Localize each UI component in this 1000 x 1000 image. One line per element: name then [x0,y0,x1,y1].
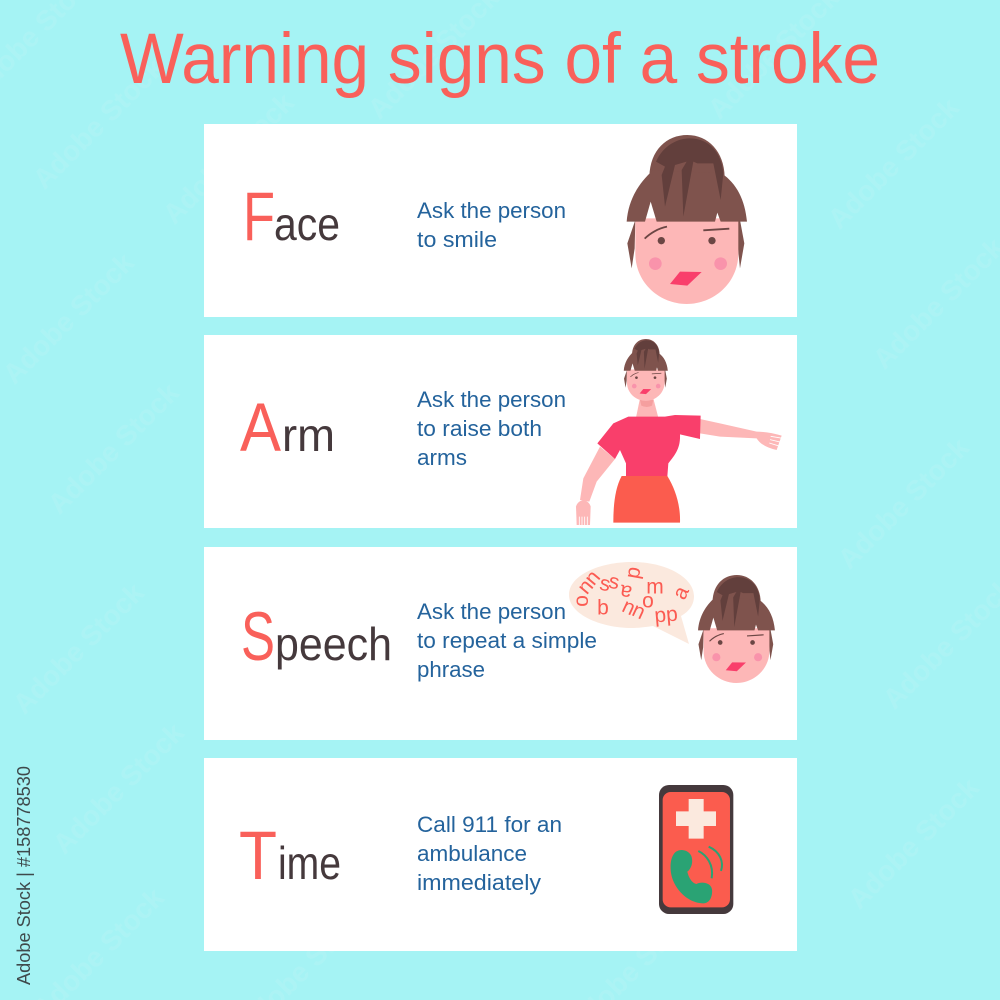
stock credit: Adobe Stock | #158778530 [13,766,34,985]
watermark pattern: Adobe Stock [27,52,170,195]
speech bubble with scrambled letters: s [607,570,621,594]
icon: small head [624,339,668,401]
heading: Speech [241,598,392,675]
text: ask the person to repeat a simple phrase [417,599,597,682]
text: ask the person to raise both arms: Ask the person [417,387,566,412]
text: ask the person to raise both arms: to raise both [417,416,542,441]
text: ask the person to repeat a simple phrase: phrase [417,657,485,682]
heading: Time: T [239,817,277,894]
speech bubble with scrambled letters: a [668,583,694,603]
speech bubble with scrambled letters: o [572,595,594,607]
heading: Arm: A [240,389,281,466]
speech bubble with scrambled letters: d [623,565,647,581]
heading: Face [243,178,340,255]
heading: Arm [240,389,335,466]
speech bubble with scrambled letters: pp [653,603,679,627]
text: ask the person to smile: Ask the person [417,198,566,223]
heading: Time [239,817,341,894]
heading: Face: ace [274,198,340,250]
speech bubble with scrambled letters: u [628,600,648,626]
panel: time [204,758,797,951]
title: Warning signs of a stroke [120,20,880,99]
icon: phone with medical cross [659,785,733,914]
watermark pattern: Adobe Stock [842,772,985,915]
text: ask the person to repeat a simple phrase: to repeat a simple [417,628,597,653]
panel: arm [204,335,797,528]
speech bubble with scrambled letters [569,562,694,644]
panel: speech [204,547,797,740]
watermark pattern: Adobe Stock [7,577,150,720]
text: ask the person to smile: to smile [417,227,497,252]
icon: head speaking [698,575,775,683]
text: call 911 for an ambulance immediately [417,812,562,895]
text: ask the person to smile [417,198,566,252]
watermark pattern: Adobe Stock [832,432,975,575]
text: call 911 for an ambulance immediately: Call 911 for an [417,812,562,837]
watermark pattern: Adobe Stock [822,92,965,235]
heading: Arm: rm [282,409,335,461]
watermark pattern: Adobe Stock [157,87,300,230]
text: call 911 for an ambulance immediately: ambulance [417,841,527,866]
watermark pattern: Adobe Stock [47,717,190,860]
text: ask the person to raise both arms: arms [417,445,467,470]
speech bubble with scrambled letters: a [618,580,634,604]
speech bubble with scrambled letters: u [574,576,600,600]
text: ask the person to repeat a simple phrase: Ask the person [417,599,566,624]
heading: Time: ime [278,837,341,889]
speech bubble with scrambled letters: b [597,596,609,620]
icon: drooping face [627,135,747,304]
heading: Speech: S [241,598,275,675]
speech bubble with scrambled letters: o [642,590,654,612]
speech bubble with scrambled letters: u [581,567,607,591]
speech bubble with scrambled letters: m [646,576,664,598]
icon: woman with one arm drooping [576,398,783,526]
heading: Speech: peech [275,618,392,670]
speech bubble with scrambled letters: u [618,596,638,622]
text: ask the person to raise both arms [417,387,566,470]
speech bubble with scrambled letters: s [598,572,612,596]
watermark pattern: Adobe Stock [0,247,140,390]
text: call 911 for an ambulance immediately: immediately [417,870,541,895]
watermark pattern: Adobe Stock [42,377,185,520]
heading: Face: F [243,178,275,255]
panel: face [204,124,797,317]
